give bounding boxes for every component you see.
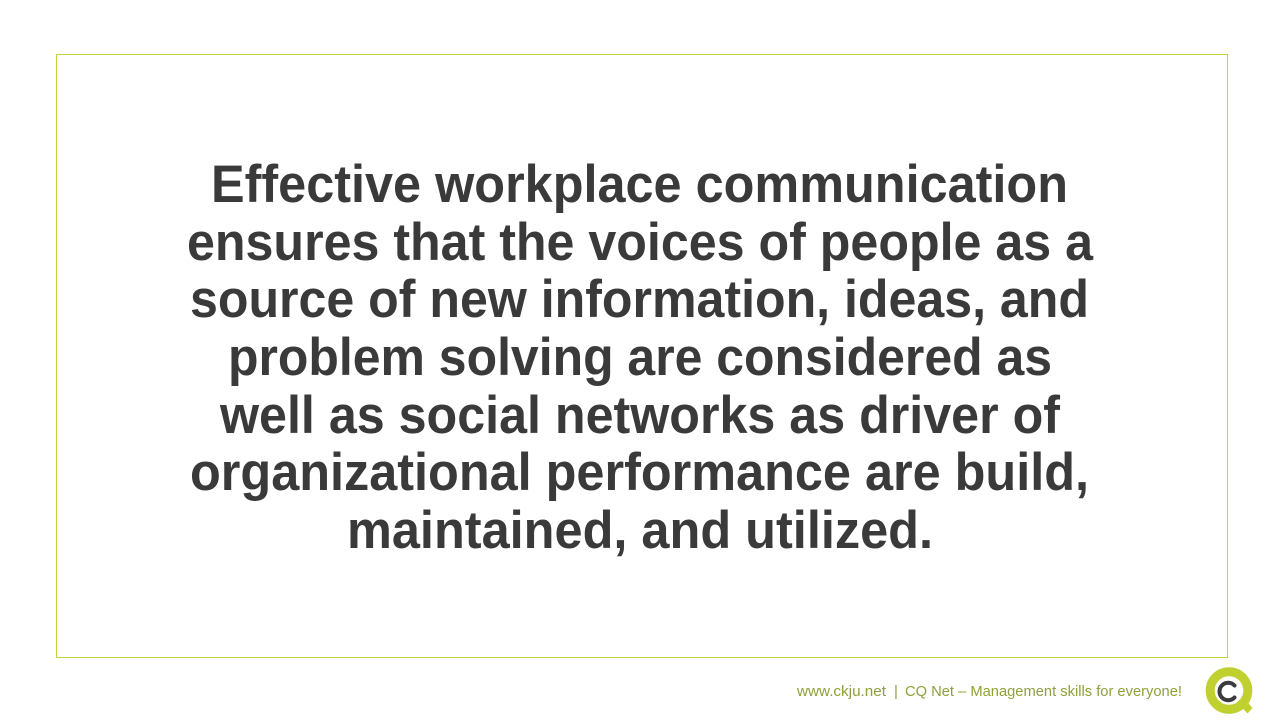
heading: main statement text: maintained, and utilized. xyxy=(347,501,933,560)
heading: main statement text: well as social networks as driver of xyxy=(219,386,1060,445)
icon: CQ logo xyxy=(1210,672,1252,714)
heading: main statement text: Effective workplace communication xyxy=(211,155,1068,214)
heading: main statement text: organizational performance are build, xyxy=(190,443,1089,502)
heading: main statement text: source of new information, ideas, and xyxy=(190,270,1089,329)
footer: website and tagline: | xyxy=(894,683,898,700)
heading: main statement text: problem solving are considered as xyxy=(228,328,1052,387)
footer: website and tagline: www.ckju.net xyxy=(796,683,887,700)
heading: main statement text xyxy=(187,155,1093,560)
footer: website and tagline: CQ Net – Management skills for everyone! xyxy=(905,683,1182,700)
heading: main statement text: ensures that the voices of people as a xyxy=(187,213,1093,272)
panel: green outlined frame xyxy=(56,54,1228,658)
